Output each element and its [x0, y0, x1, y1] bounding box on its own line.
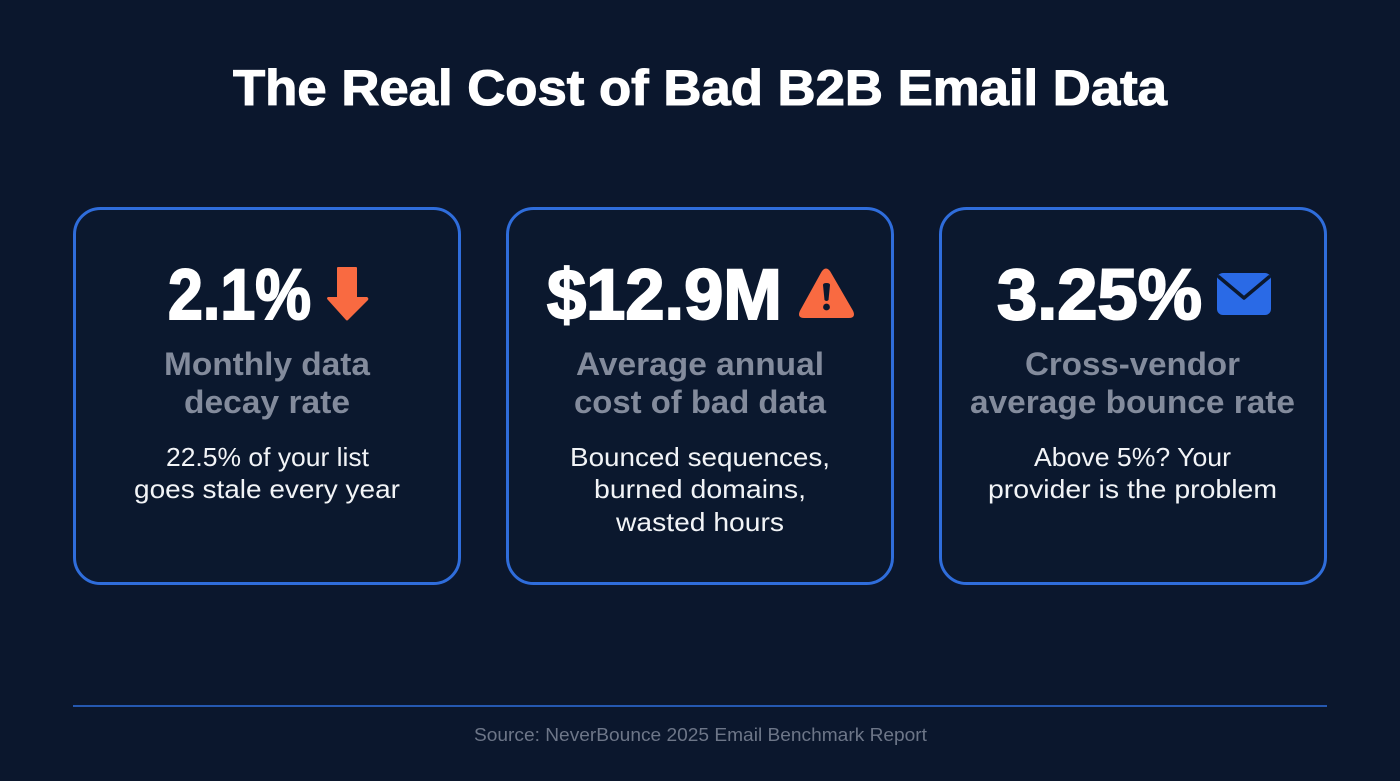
source note: Source: NeverBounce 2025 Email Benchmark Report	[474, 725, 927, 745]
icon: warning triangle	[800, 270, 853, 317]
panel: monthly data decay	[74, 208, 460, 584]
description: bounced sequences: Bounced sequences,	[570, 442, 830, 472]
description: provider problem: provider is the problem	[988, 474, 1277, 504]
description: list goes stale	[134, 442, 400, 504]
label: average annual cost	[574, 346, 826, 420]
label: monthly data decay rate: Monthly data	[164, 346, 370, 382]
label: monthly data decay rate	[164, 346, 370, 420]
icon: envelope	[1217, 273, 1271, 315]
label: average annual cost: Average annual	[576, 346, 824, 382]
title: The Real Cost of Bad B2B Email Data	[233, 60, 1168, 116]
panel: bounce rate	[940, 208, 1326, 584]
icon: down arrow	[327, 267, 368, 320]
description: list goes stale: goes stale every year	[134, 474, 400, 504]
description: list goes stale: 22.5% of your list	[166, 442, 370, 472]
label: cross-vendor bounce rate	[970, 346, 1295, 420]
description: bounced sequences	[570, 442, 830, 537]
stat: 3.25%: 3.25%	[997, 256, 1202, 335]
description: provider problem: Above 5%? Your	[1034, 442, 1231, 472]
panel: annual cost of bad data	[508, 208, 892, 584]
description: bounced sequences: burned domains,	[594, 474, 806, 504]
label: monthly data decay rate: decay rate	[184, 384, 350, 420]
label: cross-vendor bounce rate: Cross-vendor	[1025, 346, 1240, 382]
stat: 2.1%: 2.1%	[168, 256, 311, 335]
stat: $12.9M: $12.9M	[547, 256, 782, 335]
label: cross-vendor bounce rate: average bounce rate	[970, 384, 1295, 420]
description: provider problem	[988, 442, 1277, 504]
description: bounced sequences: wasted hours	[615, 507, 784, 537]
label: average annual cost: cost of bad data	[574, 384, 826, 420]
